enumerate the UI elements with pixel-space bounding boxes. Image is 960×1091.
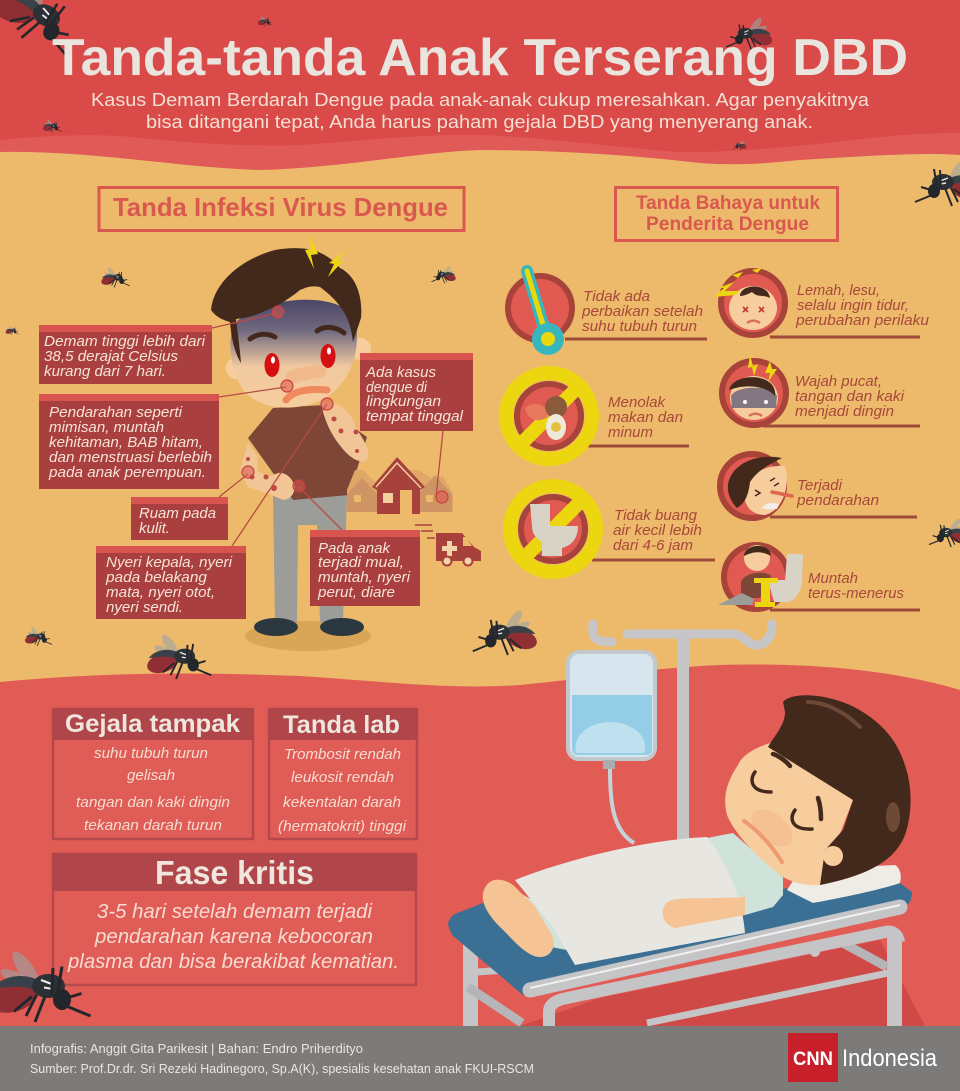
- panel: tanda lab: Tanda lab: [283, 711, 400, 739]
- callout: pendarahan: dan menstruasi berlebih: [49, 449, 212, 466]
- mosquitoes: [0, 0, 960, 679]
- callout: nyeri: Nyeri kepala, nyeri: [106, 554, 233, 571]
- panel: tanda lab: leukosit rendah: [291, 769, 394, 786]
- danger sign: bleeding: Terjadi: [797, 477, 843, 494]
- panel: fase kritis: plasma dan bisa berakibat kematian.: [67, 951, 399, 973]
- danger sign: no urination: Tidak buang: [614, 507, 698, 524]
- callout: ada kasus: dengue di: [366, 379, 428, 396]
- CNN Indonesia logo: [788, 1033, 938, 1082]
- panel: gejala tampak: Gejala tampak: [65, 710, 240, 738]
- danger sign: thermometer: suhu tubuh turun: [582, 318, 697, 335]
- callout: ruam: Ruam pada: [139, 505, 216, 522]
- panel: fase kritis: [52, 853, 417, 985]
- panel: tanda lab: (hermatokrit) tinggi: [278, 818, 407, 835]
- CNN Indonesia logo: Indonesia: [842, 1045, 938, 1072]
- danger sign: vomiting: Muntah: [808, 570, 858, 587]
- danger sign: lethargy: perubahan perilaku: [795, 312, 930, 329]
- callout: ada kasus: tempat tinggal: [366, 408, 464, 425]
- subtitle: [91, 90, 870, 132]
- panel: gejala tampak: [52, 708, 254, 839]
- title: Tanda-tanda Anak Terserang DBD: [52, 29, 908, 87]
- heading: Tanda Bahaya: Tanda Bahaya untuk: [636, 193, 820, 214]
- danger sign: thermometer: [508, 271, 707, 355]
- boy character illustration: [211, 236, 371, 651]
- panel: tanda lab: kekentalan darah: [283, 794, 401, 811]
- danger sign: thermometer: Tidak ada: [583, 288, 650, 305]
- callout: ruam: [131, 497, 228, 540]
- danger sign: no urination: air kecil lebih: [613, 522, 702, 539]
- callout: ada kasus: lingkungan: [366, 393, 441, 410]
- panel: gejala tampak: tekanan darah turun: [84, 817, 222, 834]
- callout: pada anak: Pada anak: [318, 540, 391, 557]
- panel: gejala tampak: gelisah: [127, 767, 175, 784]
- danger sign: pale face: tangan dan kaki: [795, 388, 905, 405]
- danger sign: vomiting: [718, 545, 920, 610]
- panel: tanda lab: [268, 708, 418, 839]
- callout: pendarahan: kehitaman, BAB hitam,: [49, 434, 203, 451]
- heading: Tanda Infeksi Virus Dengue: [99, 188, 464, 230]
- danger sign: refuses food: Menolak: [608, 394, 667, 411]
- danger sign: bleeding: pendarahan: [796, 492, 879, 509]
- callout: pada anak: perut, diare: [317, 584, 395, 601]
- subtitle: Kasus Demam Berdarah Dengue pada anak-anak cukup meresahkan. Agar penyakitnya: [91, 90, 870, 110]
- danger sign: pale face: menjadi dingin: [795, 403, 894, 420]
- panel: fase kritis: pendarahan karena kebocoran: [94, 926, 373, 948]
- sick child lying on bed: [483, 695, 911, 965]
- callout: demam tinggi: [39, 325, 212, 384]
- footer credits: Infografis: Anggit Gita Parikesit | Bahan: Endro Priherdityo: [30, 1041, 363, 1056]
- callout: pendarahan: Pendarahan seperti: [49, 404, 183, 421]
- bottom red band: [0, 664, 960, 1030]
- danger sign: lethargy: [714, 268, 930, 337]
- callout: pada anak: muntah, nyeri: [318, 569, 411, 586]
- callout leader lines and markers: [212, 306, 448, 546]
- callout: pendarahan: [39, 394, 219, 489]
- footer credits: [30, 1041, 534, 1076]
- heading: Tanda Bahaya: Penderita Dengue: [646, 214, 809, 235]
- callout: pada anak: [310, 530, 420, 606]
- CNN Indonesia logo: CNN: [793, 1049, 833, 1070]
- callout: demam tinggi: Demam tinggi lebih dari: [44, 333, 206, 350]
- callout: nyeri: nyeri sendi.: [106, 599, 183, 616]
- callout: pendarahan: mimisan, muntah: [49, 419, 164, 436]
- danger sign: no urination: dari 4-6 jam: [613, 537, 693, 554]
- danger sign: lethargy: selalu ingin tidur,: [797, 297, 909, 314]
- callout: ruam: kulit.: [139, 520, 170, 537]
- panel: gejala tampak: tangan dan kaki dingin: [76, 794, 230, 811]
- danger sign: pale face: [722, 355, 920, 426]
- danger sign: no urination: [510, 486, 715, 572]
- subtitle: bisa ditangani tepat, Anda harus paham gejala DBD yang menyerang anak.: [146, 112, 813, 132]
- callout: demam tinggi: 38,5 derajat Celsius: [44, 348, 179, 365]
- danger sign: vomiting: terus-menerus: [808, 585, 904, 602]
- callout: pendarahan: pada anak perempuan.: [48, 464, 206, 481]
- houses icon: [347, 457, 453, 514]
- panel: fase kritis: 3-5 hari setelah demam terjadi: [97, 901, 373, 923]
- danger sign: bleeding: [720, 454, 917, 518]
- danger sign: thermometer: perbaikan setelah: [581, 303, 703, 320]
- callout: nyeri: pada belakang: [105, 569, 208, 586]
- footer bar: [0, 1026, 960, 1091]
- callout: ada kasus: Ada kasus: [365, 364, 436, 381]
- callout: ada kasus: [360, 353, 473, 431]
- callout: nyeri: [96, 546, 246, 619]
- footer credits: Sumber: Prof.Dr.dr. Sri Rezeki Hadinegoro, Sp.A(K), spesialis kesehatan anak FKUI-RSCM: [30, 1061, 534, 1076]
- heading: Tanda Infeksi Virus Dengue: Tanda Infeksi Virus Dengue: [113, 192, 448, 222]
- heading: Tanda Bahaya: [616, 188, 838, 240]
- panel: tanda lab: Trombosit rendah: [284, 746, 401, 763]
- danger sign: refuses food: minum: [608, 424, 653, 441]
- top red header band: [0, 0, 960, 170]
- danger sign: pale face: Wajah pucat,: [795, 373, 882, 390]
- IV drip stand and bag: [568, 624, 772, 844]
- callout: pada anak: terjadi mual,: [318, 554, 404, 571]
- mosquito over panel corner: [0, 948, 91, 1022]
- callout: nyeri: mata, nyeri otot,: [106, 584, 215, 601]
- danger sign: refuses food: [506, 373, 689, 459]
- callout: demam tinggi: kurang dari 7 hari.: [44, 363, 166, 380]
- danger sign: lethargy: Lemah, lesu,: [797, 282, 880, 299]
- panel: fase kritis: Fase kritis: [155, 854, 314, 891]
- panel: gejala tampak: suhu tubuh turun: [94, 745, 208, 762]
- hospital bed: [448, 883, 925, 1026]
- danger sign: refuses food: makan dan: [608, 409, 683, 426]
- ambulance icon: [415, 525, 481, 566]
